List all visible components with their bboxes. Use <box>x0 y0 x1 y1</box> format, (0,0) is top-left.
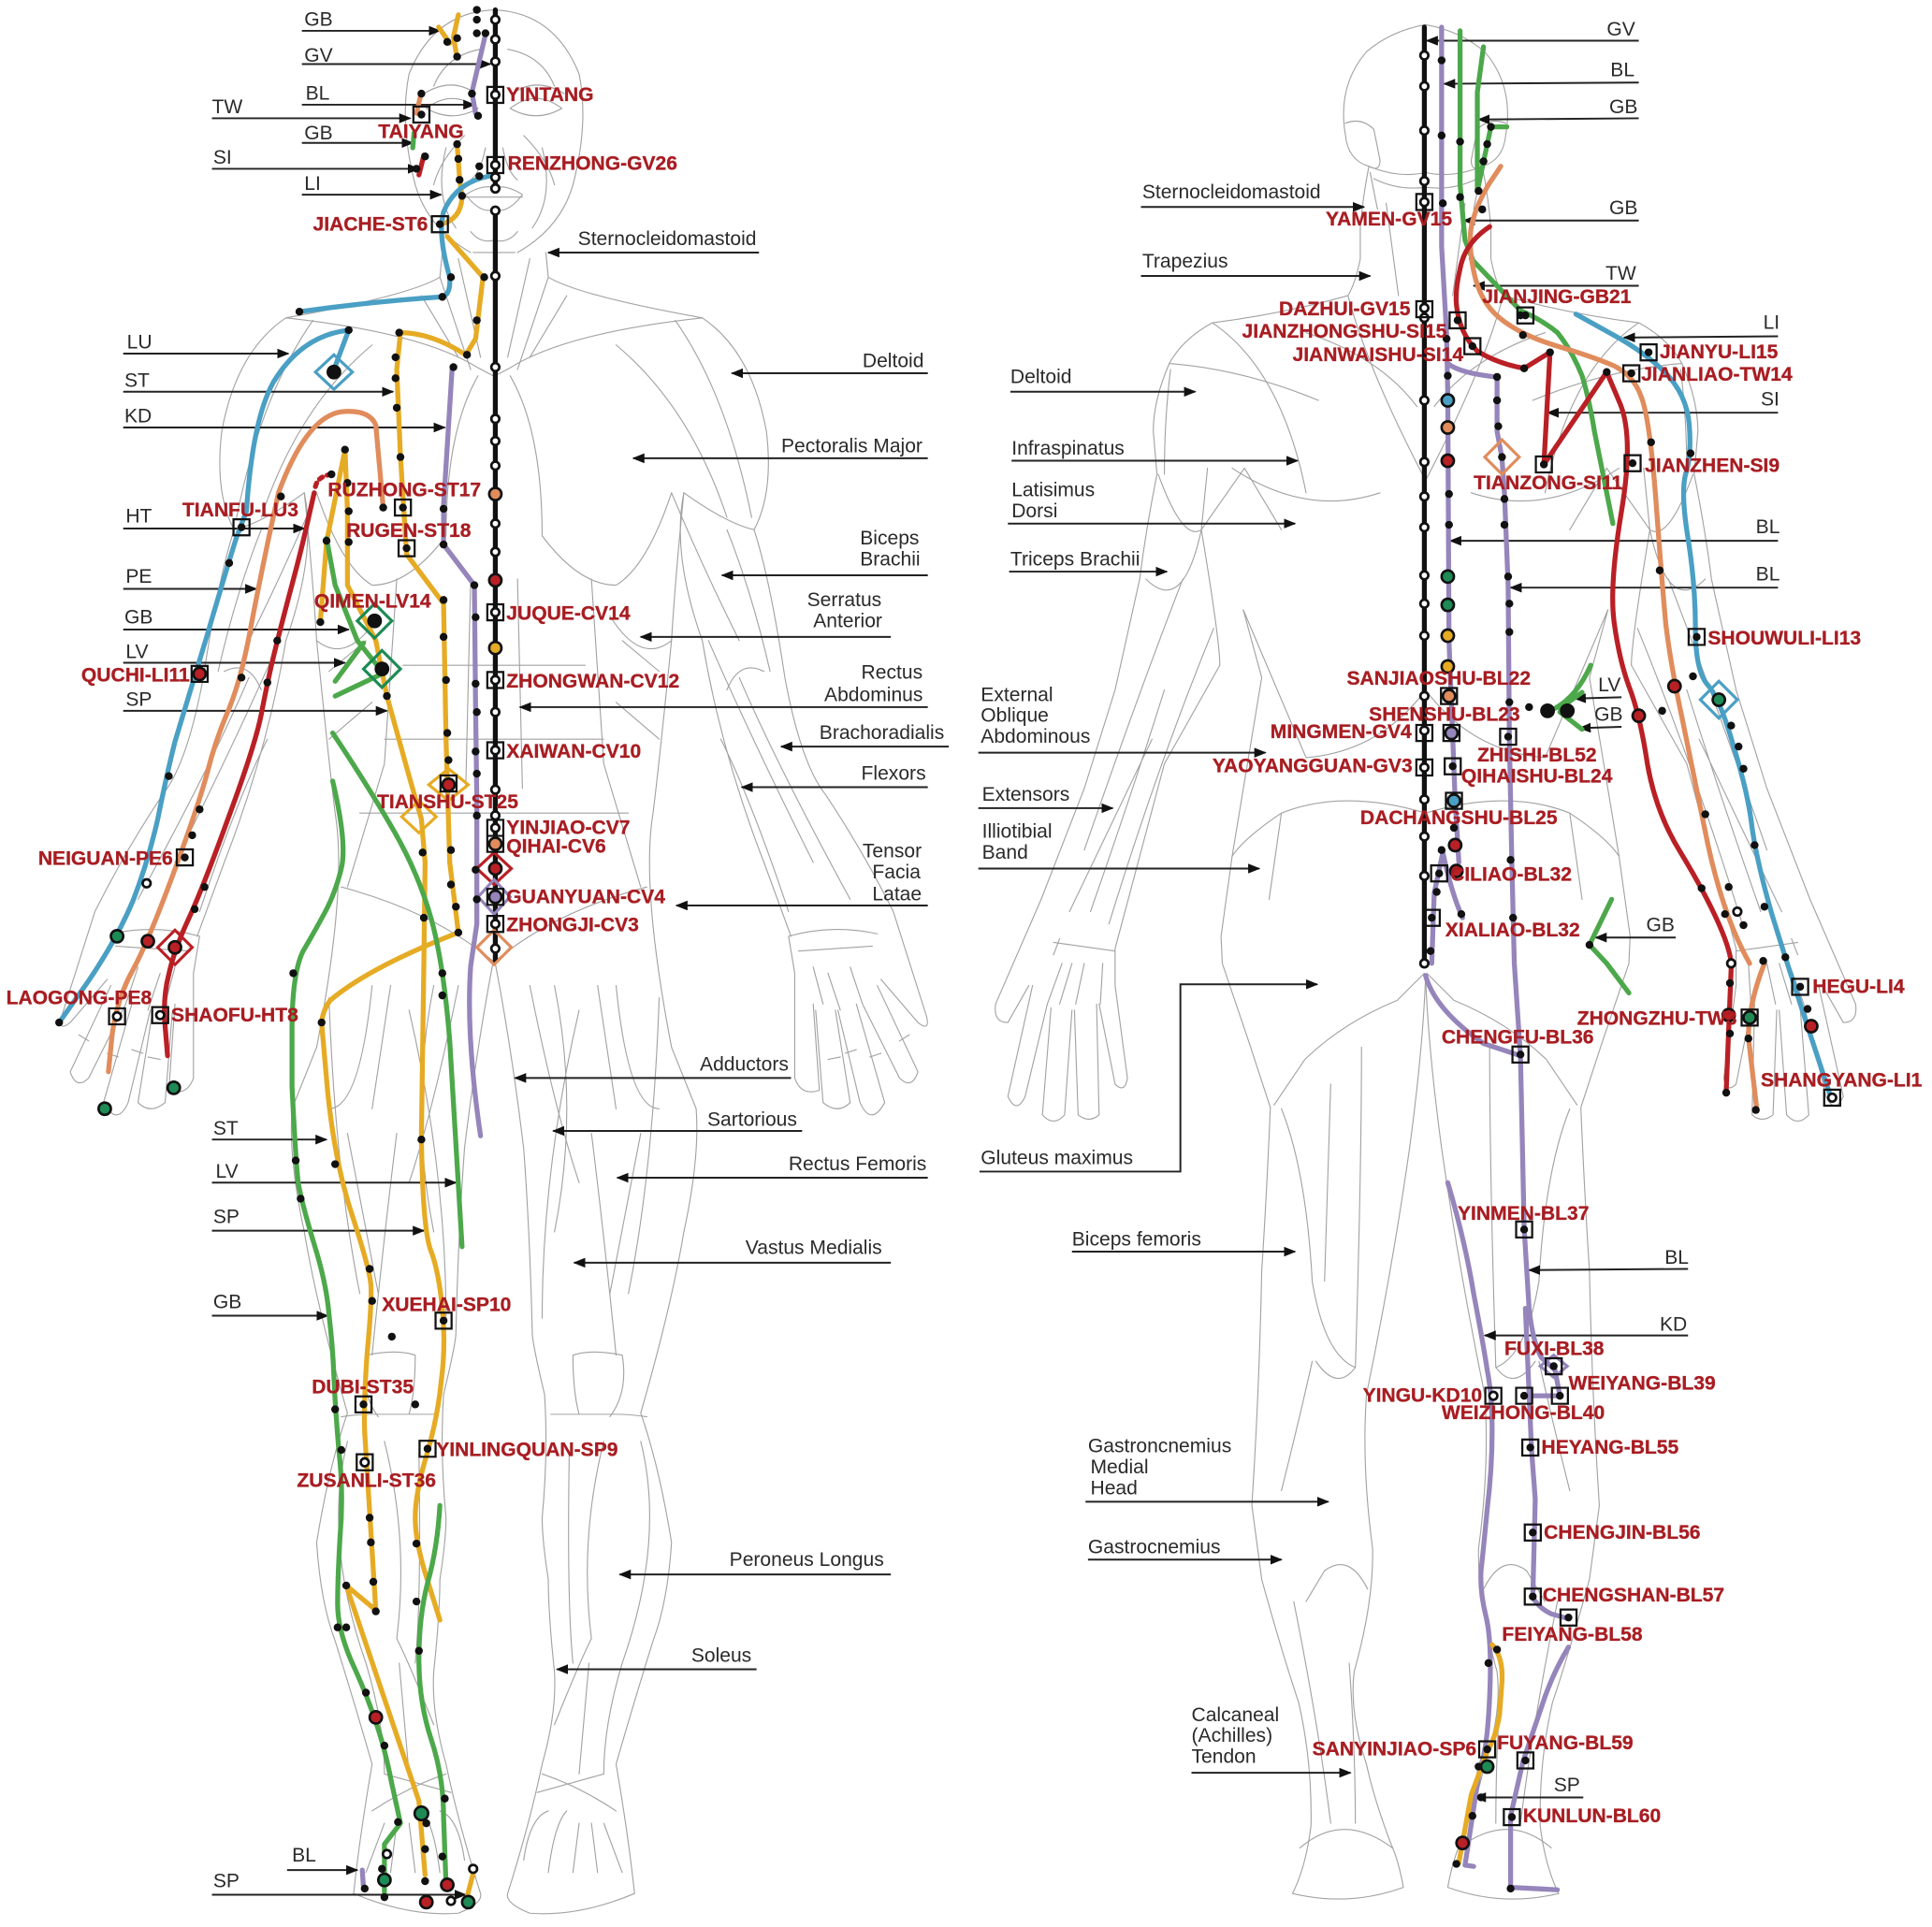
arrow: Peroneus Longus: Peroneus Longus <box>730 1549 884 1571</box>
triple warmer temple <box>416 93 421 113</box>
acupoint names, back figure: CILIAO-BL32 <box>1450 864 1572 886</box>
acupoint names, front figure: TAIYANG <box>378 122 464 143</box>
arrow: Gluteus maximus <box>980 984 1317 1171</box>
arrow: SI back: SI <box>1761 388 1779 410</box>
arrow: ST thigh <box>212 1118 327 1139</box>
acupoint names, back figure: CHENGFU-BL36 <box>1442 1026 1594 1048</box>
acupoint names, front figure: QIMEN-LV14 <box>314 590 431 612</box>
bladder gluteal link <box>1426 976 1520 1056</box>
arrow: GB back neck: GB <box>1609 197 1637 219</box>
arrow: BL outer back: BL <box>1756 563 1780 585</box>
arrow: Deltoid back: Deltoid <box>1010 367 1071 388</box>
arrow: Trapezius: Trapezius <box>1142 251 1228 272</box>
arrow: TW: TW <box>212 96 242 118</box>
diamond: conception orange <box>477 930 512 964</box>
arrow: GB face: GB <box>304 123 333 144</box>
spleen ankle <box>1459 1644 1503 1862</box>
muscle and meridian arrows, front figure <box>123 9 949 1894</box>
acupoint names, back figure: QIHAISHU-BL24 <box>1461 765 1613 787</box>
bladder outer line <box>1447 364 1560 1396</box>
arrow: Rectus Femoris: Rectus Femoris <box>789 1153 926 1175</box>
arrow: Gastroncnemius Medial Head: Head <box>1091 1477 1138 1499</box>
arrow: Serratus Anterior: Serratus <box>807 589 881 611</box>
governing vessel back <box>1422 27 1426 964</box>
arrow: GB buttock: GB <box>1646 915 1675 936</box>
pericardium line <box>109 412 384 1072</box>
arrow: HT: HT <box>125 505 153 527</box>
arrow: External Oblique Abdominous <box>979 684 1266 753</box>
acupoint names, front figure: LAOGONG-PE8 <box>7 987 153 1008</box>
liver lower leg <box>419 1505 446 1885</box>
liver and gallbladder hip branches <box>1555 665 1591 730</box>
acupoint names, front figure: YINTANG <box>506 84 593 106</box>
acupoint names, back figure: YINMEN-BL37 <box>1458 1203 1589 1224</box>
arrow: TW back: TW <box>1605 263 1636 284</box>
acupoint names, back figure: FUYANG-BL59 <box>1497 1732 1634 1754</box>
bladder lower leg <box>1511 1309 1568 1890</box>
arrow: BL foot: BL <box>292 1845 316 1866</box>
acupoint names, back figure: JIANYU-LI15 <box>1660 341 1779 363</box>
coloured acupoints <box>98 394 1818 1908</box>
arrow: Illiotibial Band: Band <box>982 842 1028 863</box>
arrow: GV back: GV <box>1606 19 1635 40</box>
acupoint names, front figure: NEIGUAN-PE6 <box>38 848 173 870</box>
arrow: GB knee: GB <box>213 1292 241 1313</box>
arrow: Deltoid: Deltoid <box>863 350 923 371</box>
back body outline <box>995 24 1856 1899</box>
arrow: Latisimus Dorsi: Latisimus <box>1011 480 1095 501</box>
arrow: Gastrocnemius: Gastrocnemius <box>1088 1537 1221 1558</box>
arrow: GV: GV <box>304 45 333 66</box>
acupoint names, front figure: XUEHAI-SP10 <box>382 1294 511 1315</box>
acupoint names, back figure: DACHANGSHU-BL25 <box>1360 807 1558 829</box>
acupoint names, back figure: SANYINJIAO-SP6 <box>1313 1739 1476 1760</box>
gallbladder buttock <box>1590 899 1629 992</box>
arrow: PE: PE <box>125 566 152 587</box>
acupoint names, back figure: ZHISHI-BL52 <box>1477 745 1597 766</box>
arrow: Serratus Anterior: Anterior <box>813 610 882 631</box>
arrow: SP thigh: SP <box>213 1207 240 1228</box>
arrow: Biceps Brachii: Biceps <box>860 528 919 549</box>
acupoint names, front figure: JIACHE-ST6 <box>313 213 428 235</box>
arrow: LU: LU <box>127 332 153 354</box>
gallbladder long line <box>292 781 400 1897</box>
governing and conception vessel <box>493 10 497 961</box>
diamond: stomach lower <box>401 801 436 833</box>
spleen line to shin <box>345 450 443 1620</box>
arrow: GB face <box>302 123 413 144</box>
diamond: large intestine forearm <box>1700 681 1737 718</box>
gallbladder head lines <box>1460 31 1507 259</box>
dots inside square markers <box>185 114 1800 1818</box>
acupoint names, back figure: YAMEN-GV15 <box>1326 209 1452 230</box>
foot segments <box>467 1869 474 1897</box>
acupoint names, front figure: QIHAI-CV6 <box>506 835 606 857</box>
acupoint names, back figure <box>1213 209 1923 1827</box>
acupoint names, back figure: CHENGJIN-BL56 <box>1544 1522 1701 1543</box>
acupoint names, back figure: KUNLUN-BL60 <box>1523 1805 1661 1827</box>
kidney line <box>443 367 481 1136</box>
acupoint names, back figure: MINGMEN-GV4 <box>1271 721 1412 743</box>
triple warmer line <box>1470 167 1765 1111</box>
acupoint names, front figure: YINLINGQUAN-SP9 <box>436 1440 617 1461</box>
arrow: LI back: LI <box>1764 312 1779 334</box>
bladder foot <box>362 1870 364 1888</box>
arrow: Biceps Brachii: Brachii <box>860 548 921 570</box>
arrow: LV back: LV <box>1598 674 1620 696</box>
arrow: Calcaneal Tendon <box>1192 1704 1350 1773</box>
acupoint names, front figure: ZHONGWAN-CV12 <box>506 671 679 692</box>
bladder on face <box>472 35 486 113</box>
arrow: Latisimus Dorsi <box>1008 480 1295 524</box>
meridians, back figure <box>1424 27 1831 1890</box>
arrow: GB hip <box>1579 703 1623 728</box>
diamond: lung <box>315 355 353 389</box>
acupoint names, back figure: JIANWAISHU-SI14 <box>1292 344 1463 366</box>
arrow: LV: LV <box>125 641 149 662</box>
acupoint names, back figure: YAOYANGGUAN-GV3 <box>1213 756 1413 777</box>
arrow: Tensor Facia Latae: Latae <box>872 884 922 906</box>
acupoint names, back figure: XIALIAO-BL32 <box>1445 920 1580 941</box>
diamond: conception red <box>477 852 512 885</box>
arrow: GB knee <box>212 1292 327 1316</box>
arrow: Vastus Medialis: Vastus Medialis <box>746 1238 882 1259</box>
acupoint names, back figure: SHENSHU-BL23 <box>1369 703 1520 725</box>
arrow: Sternocleidomastoid: Sternocleidomastoid <box>578 228 757 250</box>
arrow: Biceps Brachii <box>722 528 928 575</box>
arrow: Sartorious: Sartorious <box>707 1109 797 1131</box>
bladder inner line <box>1442 27 1459 862</box>
diamond: weiyang <box>1540 1355 1567 1377</box>
acupoint names, back figure: ZHONGZHU-TW3 <box>1577 1008 1737 1030</box>
acupoint names, back figure: DAZHUI-GV15 <box>1279 298 1411 320</box>
small intestine line <box>1456 226 1731 1091</box>
acupoint names, back figure: SANJIAOSHU-BL22 <box>1346 668 1531 689</box>
arrow: Biceps femoris: Biceps femoris <box>1072 1228 1201 1250</box>
acupoint names, front figure <box>7 84 679 1492</box>
arrow: BL foot <box>287 1845 357 1870</box>
arrow: Latisimus Dorsi: Dorsi <box>1011 500 1057 522</box>
diamond: tianzong <box>1485 440 1519 474</box>
arrow: LV thigh: LV <box>215 1161 239 1182</box>
acupoint names, back figure: JIANZHONGSHU-SI15 <box>1242 321 1447 342</box>
arrow: SP ankle <box>1474 1775 1583 1797</box>
acupoint names, back figure: FEIYANG-BL58 <box>1502 1624 1643 1645</box>
small intestine cheek <box>419 155 424 175</box>
acupoint names, front figure: GUANYUAN-CV4 <box>506 886 665 907</box>
arrow: SP foot: SP <box>213 1871 240 1892</box>
arrow: Calcaneal Tendon: Calcaneal <box>1192 1704 1279 1726</box>
arrow: Soleus: Soleus <box>691 1645 751 1667</box>
acupoint names, back figure: CHENGSHAN-BL57 <box>1543 1585 1724 1606</box>
arrow: Tensor Facia Latae: Facia <box>872 862 921 883</box>
acupoint names, front figure: ZHONGJI-CV3 <box>506 915 639 936</box>
arrow: Flexors: Flexors <box>862 763 926 785</box>
arrow: SP ankle: SP <box>1554 1775 1580 1796</box>
arrow: Tensor Facia Latae: Tensor <box>863 841 922 862</box>
large black acupoints <box>334 372 1567 711</box>
arrow: KD: KD <box>124 406 152 427</box>
front body outline <box>61 10 927 1914</box>
arrow: Illiotibial Band: Illiotibial <box>982 821 1053 843</box>
diamond: heart <box>158 930 192 964</box>
acupoint names, front figure: SHAOFU-HT8 <box>171 1005 298 1026</box>
diamond: liver <box>364 650 400 688</box>
arrow: Calcaneal Tendon: Tendon <box>1192 1746 1257 1768</box>
diamond: conception purple <box>478 879 510 914</box>
arrow: BL leg: BL <box>1664 1247 1689 1268</box>
muscle and meridian arrows, back figure <box>979 19 1780 1797</box>
acupoint names, front figure: JUQUE-CV14 <box>506 602 631 624</box>
acupoint names, front figure: ZUSANLI-ST36 <box>297 1471 436 1492</box>
arrow: Rectus Abdominus: Abdominus <box>824 684 922 705</box>
arrow: SP: SP <box>125 689 152 711</box>
arrow: External Oblique Abdominous: Abdominous <box>981 726 1090 747</box>
acupoint names, back figure: JIANLIAO-TW14 <box>1641 364 1793 385</box>
arrow: GB head: GB <box>304 9 333 31</box>
arrow: Gastroncnemius Medial Head: Gastroncnemius <box>1088 1436 1231 1457</box>
arrow: GB chest: GB <box>124 606 153 628</box>
acupoint names, back figure: WEIYANG-BL39 <box>1568 1373 1716 1395</box>
arrow: LV back <box>1575 674 1621 699</box>
acupoint names, back figure: FUXI-BL38 <box>1504 1339 1605 1360</box>
acupoint names, front figure: YINJIAO-CV7 <box>506 818 631 839</box>
arrow: KD leg: KD <box>1660 1313 1687 1335</box>
acupoint names, back figure: SHANGYANG-LI1 <box>1761 1070 1923 1092</box>
arrow: Brachoradialis: Brachoradialis <box>820 722 944 744</box>
lung line <box>59 330 349 1022</box>
arrow: External Oblique Abdominous: Oblique <box>981 705 1049 727</box>
arrow: Infraspinatus: Infraspinatus <box>1011 438 1125 459</box>
heart line <box>165 493 314 1056</box>
acupoint names, front figure: TIANSHU-ST25 <box>377 791 518 813</box>
liver long line <box>333 733 462 1247</box>
arrow: Rectus Abdominus <box>520 662 928 707</box>
arrow: Adductors: Adductors <box>700 1053 789 1075</box>
arrow: SI: SI <box>213 147 232 168</box>
acupoint names, back figure: TIANZONG-SI11 <box>1474 472 1623 494</box>
arrow: GB buttock <box>1595 915 1676 937</box>
acupoint names, back figure: SHOUWULI-LI13 <box>1707 628 1861 649</box>
arrow: Serratus Anterior <box>641 589 891 637</box>
acupoint names, front figure: RUZHONG-ST17 <box>327 480 481 501</box>
arrow: GB hip: GB <box>1594 703 1623 725</box>
arrow: Sternocleidomastoid back: Sternocleidomastoid <box>1142 181 1321 203</box>
diamond: qimen <box>357 603 392 638</box>
head gallbladder lines <box>439 15 458 58</box>
arrow: Gastroncnemius Medial Head: Medial <box>1091 1456 1149 1478</box>
acupoint names, front figure: TIANFU-LU3 <box>182 500 298 521</box>
arrow: Tensor Facia Latae <box>676 841 928 906</box>
arrow: Triceps Brachii: Triceps Brachii <box>1010 548 1140 570</box>
arrow: BL back: BL <box>1610 60 1634 81</box>
arrow: Extensors: Extensors <box>982 784 1069 805</box>
arrow: Gastroncnemius Medial Head <box>1085 1436 1329 1501</box>
spleen chest branch <box>320 450 345 622</box>
acupoint names, front figure: RUGEN-ST18 <box>346 520 472 542</box>
acupoint names, front figure: RENZHONG-GV26 <box>508 153 677 175</box>
arrow: LI: LI <box>304 173 321 195</box>
acupoint names, front figure: XAIWAN-CV10 <box>506 741 641 762</box>
stomach face <box>441 144 462 225</box>
acupoint names, back figure: JIANZHEN-SI9 <box>1645 455 1779 476</box>
bladder hairpin <box>1431 852 1462 964</box>
large intestine face and neck <box>299 176 489 312</box>
liver and gallbladder chest <box>327 539 382 696</box>
diamond point markers <box>158 355 1737 1377</box>
acupoint names, back figure: JIANJING-GB21 <box>1482 286 1632 308</box>
gallbladder temple <box>413 133 414 148</box>
arrow: Rectus Abdominus: Rectus <box>862 662 922 684</box>
arrow: GB back head: GB <box>1609 96 1637 118</box>
acupoint names, front figure: DUBI-ST35 <box>312 1376 414 1398</box>
large intestine line <box>1576 314 1831 1097</box>
gallbladder shoulder line <box>1471 259 1613 524</box>
arrow: ST thigh: ST <box>213 1118 239 1139</box>
heart line dashed start <box>315 474 333 486</box>
arrow: Illiotibial Band <box>979 821 1259 868</box>
stomach neck to foot <box>322 237 483 1875</box>
kidney back of leg <box>1447 1182 1492 1866</box>
meridians, front figure <box>59 10 495 1897</box>
arrow: ST: ST <box>124 370 150 392</box>
arrow: Calcaneal Tendon: (Achilles) <box>1192 1725 1272 1746</box>
acupoint names, back figure: HEYANG-BL55 <box>1542 1437 1679 1458</box>
acupoint names, back figure: HEGU-LI4 <box>1812 976 1905 997</box>
arrow: BL head: BL <box>306 83 330 105</box>
acupoint names, back figure: YINGU-KD10 <box>1363 1385 1482 1407</box>
diamond: stomach upper <box>429 769 468 801</box>
arrow: Pectoralis Major: Pectoralis Major <box>781 435 922 456</box>
acupoint names, back figure: WEIZHONG-BL40 <box>1442 1402 1605 1424</box>
acupoint names, front figure: QUCHI-LI11 <box>81 664 190 686</box>
arrow: External Oblique Abdominous: External <box>981 684 1053 705</box>
arrow: BL inner back: BL <box>1756 516 1780 538</box>
arrow: Gluteus maximus: Gluteus maximus <box>981 1148 1133 1169</box>
